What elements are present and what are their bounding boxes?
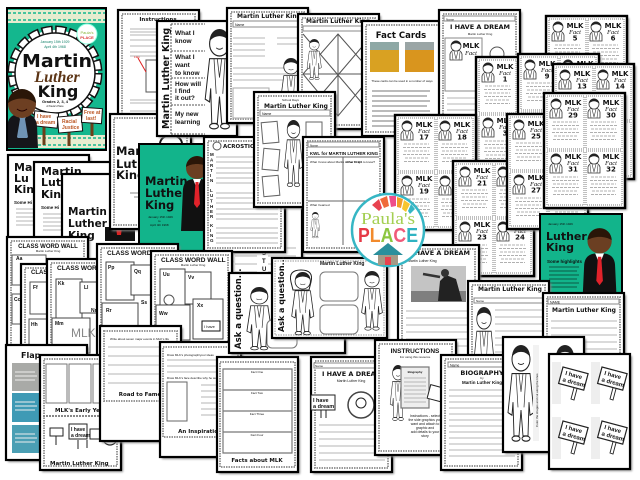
panel: cootie catcher sheet (298, 14, 381, 131)
panel: early years flap sheet (40, 355, 123, 472)
panel: acrostic sheet: L (210, 188, 213, 193)
panel: fact cards 21 to 24: Fact (475, 228, 488, 235)
panel: teal Martin Luther King sheet: Luther (145, 186, 188, 200)
panel: KWL sheet: How will (175, 81, 201, 88)
panel: fact cards 29 to 32: Fact (566, 160, 579, 167)
panel: Ask a question girl sheet: Ask a question... (277, 256, 286, 332)
panel: class word wall 4 (97, 244, 180, 361)
panel: acrostic sheet: R (210, 214, 214, 219)
panel: white sheet Martin Luther King highlights 1: Lu (14, 172, 29, 185)
panel: class word wall 3: Kk (58, 281, 65, 287)
panel: class word wall 5: Xx (197, 303, 203, 309)
scalloped circle (12, 30, 98, 116)
panel: sheet with figure and frames (254, 92, 337, 209)
panel: fact cards 17 to 20 (395, 115, 478, 232)
signs: Justice (62, 125, 79, 131)
panel: teal Martin Luther King sheet: King (145, 198, 174, 212)
panel: I have a dream with sign sheet: Name (315, 364, 323, 368)
panel: fact cards 25 to 28: 27 (531, 186, 541, 194)
panel: Facts about MLK sheet: Facts about MLK (231, 458, 283, 464)
panel: alphabet sheet (221, 196, 304, 313)
panel: fact cards 17 to 20: Fact (417, 128, 430, 135)
panel: K-W-L for Martin Luther King sheet: What I'd like to know? (346, 160, 375, 164)
panel: fact cards 29 to 32: 30 (606, 112, 616, 120)
panel: fact cards 29 to 32: 29 (568, 112, 578, 120)
panel: cover: Martin (22, 51, 92, 72)
panel: fact cards 9 to 12: Fact (540, 67, 553, 74)
panel: instructions sheet: Flap (134, 55, 140, 59)
panel: fact cards 21 to 24: MLK (474, 167, 491, 175)
panel: Instructions biography sheet: the side graphics you (408, 418, 442, 422)
panel: cover: Luther (33, 69, 80, 86)
panel: KWL sheet: What I (175, 54, 195, 61)
panel: fact cards 5 to 8: 5 (573, 34, 578, 42)
panel: fact cards 17 to 20: MLK (416, 121, 433, 129)
panel: fact cards 25 to 28: Fact (529, 127, 542, 134)
panel: acrostic sheet: T (210, 198, 213, 204)
panel: class word wall 1 (7, 237, 90, 354)
panel: fact cards 1 to 4: 3 (503, 130, 508, 138)
boy in suit (8, 89, 38, 148)
panel: acrostic sheet: E (210, 209, 213, 214)
panel: alphabet sheet: U (262, 267, 266, 273)
signs: Racial (62, 119, 77, 125)
panel: fact cards 21 to 24: Fact (475, 174, 488, 181)
panel: fact cards 5 to 8: Fact (568, 29, 581, 36)
panel: fact cards 13 to 16: 13 (577, 82, 587, 90)
panel: K-W-L for Martin Luther King sheet: What I know about Martin Luther King? (310, 160, 362, 164)
mini logo: Paula's (80, 30, 94, 35)
panel: class word wall 3: Mm (55, 321, 64, 327)
panel: An Inspiration sheet (160, 342, 243, 459)
bunting (372, 196, 415, 214)
panel: An Inspiration sheet: An Inspiration (178, 429, 222, 435)
panel: Facts about MLK sheet: Fact One (251, 370, 263, 374)
panel: acrostic sheet: M (210, 152, 214, 157)
signs: last! (86, 116, 97, 122)
panel: class word wall 4: Rr (106, 308, 112, 314)
icon: head peeking (160, 135, 182, 144)
panel: Ask a question girl sheet (272, 256, 389, 340)
panel: NAME biography lined sheet: Martin Luther King (552, 307, 616, 314)
panel: cootie catcher sheet: Martin Luther King (306, 18, 370, 25)
panel: Instructions biography sheet: story (421, 434, 429, 438)
panel: class word wall 3: MLK (71, 326, 96, 340)
panel: Biography lined sheet: Name (450, 364, 459, 368)
panel: white sheet Martin Luther King highlights 1 (8, 155, 91, 272)
panel: Ask a question boy sheet (229, 269, 347, 355)
panel: class word wall 5: Vv (188, 275, 194, 281)
panel: Road to Fame sheet: Write about seven major events in MLK's life (110, 337, 169, 341)
panel: Facts about MLK sheet: Fact Two (251, 391, 263, 395)
panel: fact cards 5 to 8: Fact (606, 29, 619, 36)
panel: teal Martin Luther King sheet: to (158, 219, 161, 223)
panel: Ask a question boy sheet: Ask a question... (234, 269, 244, 349)
panel: Biography lined sheet: BIOGRAPHY (460, 369, 504, 377)
panel: sheet with Martin Luther King title: King (116, 168, 145, 182)
panel: alphabet sheet: R (262, 243, 267, 249)
panel: KWL sheet: know (175, 38, 193, 45)
panel: fact cards 1 to 4: Fact (498, 70, 511, 77)
panel: instructions sheet: Instructions (139, 17, 177, 23)
panel: KWL sheet (157, 21, 239, 138)
panel: white sheet Martin Luther King highlights 3 (62, 174, 145, 291)
panel: flap book photos sheet (6, 345, 89, 462)
image: MLK photo at podium (411, 266, 466, 302)
panel: teal Martin Luther King sheet: January 15th 1929 (148, 215, 173, 219)
panel: Martin Luther King biography lined sheet (468, 281, 551, 398)
panel: class word wall 3: Nn (91, 308, 98, 314)
panel: white sheet Martin Luther King highlights 1: Kin (14, 183, 34, 196)
panel: fact cards 29 to 32 (544, 93, 627, 210)
panel: class word wall 5 (151, 251, 234, 368)
panel: Biography lined sheet: Martin Luther King (462, 380, 502, 385)
panel: teal Luther King highlights sheet: January 15th 1929 (548, 222, 573, 226)
panel: acrostic sheet: G (210, 238, 214, 243)
panel: An Inspiration sheet: Draw MLK's photograph/your ideas (167, 353, 214, 357)
panel: class word wall 2: Hh (31, 322, 38, 328)
panel: white sheet Martin Luther King highlights 2 (34, 162, 117, 279)
panel: fact cards 25 to 28: 25 (531, 132, 541, 140)
panel: alphabet sheet: E (229, 243, 233, 249)
panel: white sheet Martin Luther King highlights 3: Martin (68, 206, 107, 218)
panel: Instructions biography sheet: want and attach to (411, 422, 439, 426)
panel: K-W-L for Martin Luther King sheet: What I learned (310, 203, 330, 207)
mini logo: PLACE (80, 35, 94, 40)
panel: I have a dream sheet: Fact (464, 50, 477, 57)
panel: sheet with Martin Luther King title (110, 114, 193, 231)
mini logo (77, 24, 97, 44)
panel: KWL sheet: My new (175, 111, 199, 118)
panel: figure strips: Color the images and cut along the lines (535, 373, 539, 427)
panel: class word wall 5: Martin Luther King (181, 263, 206, 267)
panel: fact cards 25 to 28: Fact (529, 181, 542, 188)
panel: Biography lined sheet: by (480, 376, 484, 380)
panel: white sheet Martin Luther King highlights 1: Some Hi (14, 200, 32, 205)
signs (33, 107, 102, 146)
panel: fact cards 25 to 28: MLK (528, 120, 545, 128)
panel: An Inspiration sheet: Draw MLK's face describe why he was (167, 376, 219, 380)
panel: class word wall 1: Aa (16, 256, 23, 262)
panel: NAME biography lined sheet: NAME (550, 300, 561, 304)
panel: white sheet Martin Luther King highlights 3: King (68, 230, 95, 242)
panel: sheet with figure and frames: School Days (282, 98, 299, 102)
panel: alphabet sheet: G (229, 259, 234, 265)
panel: sheet with Martin Luther King title: Luther (116, 157, 159, 171)
panel: cover: King (38, 82, 78, 101)
panel: KWL sheet: want (174, 62, 191, 69)
panel: instructions sheet (118, 10, 201, 127)
panel: fact cards 21 to 24: 21 (477, 180, 487, 188)
panel: I have a dream with sign sheet: Martin Luther King (337, 379, 365, 383)
panel: fact cards 9 to 12: 9 (545, 72, 550, 80)
panel: KWL sheet: to know (175, 70, 200, 77)
panel: fact cards 17 to 20: MLK (454, 121, 471, 129)
panel: fact cards 1 to 4: MLK (497, 117, 514, 125)
panel: fact cards 29 to 32: 31 (568, 166, 578, 174)
panel: Martin Luther King biography lined sheet: Martin Luther King (478, 286, 542, 293)
panel: KWL sheet: I find (175, 88, 191, 95)
panel: white sheet Martin Luther King highlights 3: Luther (68, 218, 108, 230)
panel: acrostic sheet: U (210, 193, 213, 198)
panel: sheet with Martin Luther King title: Martin (116, 144, 159, 158)
panel: I have a dream photo sheet: I HAVE A DREAM (410, 249, 470, 257)
panel: fact cards 9 to 12: MLK (577, 60, 594, 68)
panel: I have a dream signs (549, 354, 632, 471)
panel: fact cards 9 to 12: MLK (539, 60, 556, 68)
panel: cover: Grades 2, 3, 4 (42, 99, 69, 104)
panel: class word wall 1: Cc (14, 297, 21, 303)
panel: fact cards 21 to 24: Fact (513, 228, 526, 235)
panel: fact cards 13 to 16: 14 (615, 82, 625, 90)
icon: suited figure shoulders (105, 227, 135, 241)
panel: fact cards 13 to 16: Fact (613, 77, 626, 84)
panel: fact cards 25 to 28: MLK (528, 174, 545, 182)
panel: acrostic sheet: N (210, 233, 213, 238)
panel: teal Luther King highlights sheet (540, 214, 622, 314)
panel: fact cards 13 to 16 (553, 64, 636, 181)
panel: class word wall 2: CLASS (31, 270, 51, 276)
panel: I have a dream photo sheet (398, 245, 481, 362)
panel: class word wall 4: CLASS WORD WALL (107, 250, 172, 257)
panel: fact cards 1 to 4: MLK (497, 63, 514, 71)
panel: class word wall 3: Ll (84, 285, 89, 291)
panel: fact cards 13 to 16: MLK (574, 70, 591, 78)
panel: Martin Luther King what I know sheet: Martin Luther King (237, 13, 301, 20)
panel: fact cards 29 to 32: Fact (604, 160, 617, 167)
panel: sheet with figure and frames: Name (262, 112, 271, 116)
panel: fact cards 1 to 4: 1 (503, 76, 508, 84)
panel: white sheet Martin Luther King highlights 2: King (41, 188, 69, 201)
panel: Instructions biography sheet: Biography (408, 370, 423, 374)
panel: fact cards sheet: Fact Cards (376, 31, 426, 41)
panel: fact cards 5 to 8 (546, 16, 629, 133)
panel: teal Luther King highlights sheet: Some highlights (547, 259, 582, 264)
panel: fact cards 5 to 8: MLK (567, 22, 584, 30)
panel: early years flap sheet: MLK's Early Years (55, 408, 110, 414)
panel: KWL sheet: Martin Luther King (161, 28, 172, 129)
panel: Instructions biography sheet: add details to your (411, 430, 440, 434)
panel: fact cards 1 to 4 (476, 57, 559, 174)
panel: fact cards 21 to 24: MLK (474, 221, 491, 229)
panel: fact cards 17 to 20: 17 (419, 134, 429, 142)
panel: alphabet sheet: S (262, 251, 266, 257)
panel: acrostic sheet: I (210, 228, 211, 233)
panel: acrostic sheet: ACROSTIC (223, 144, 254, 150)
panel: class word wall 5: Uu (163, 272, 170, 278)
panel: white sheet Martin Luther King highlights 2: Lut (41, 176, 61, 189)
panel: fact cards 29 to 32: MLK (565, 99, 582, 107)
panel: alphabet sheet: F (229, 251, 233, 257)
panel: Biography lined sheet (441, 355, 524, 472)
panel: cover (7, 8, 106, 150)
panel: fact cards 17 to 20: MLK (416, 175, 433, 183)
panel: fact cards 9 to 12 (518, 54, 601, 171)
panel: K-W-L for Martin Luther King sheet (303, 137, 386, 254)
panel: acrostic sheet: K (210, 223, 214, 228)
panel: K-W-L for Martin Luther King sheet: Name (310, 144, 318, 148)
panel: I have a dream sheet: MLK (463, 42, 480, 50)
panel: early years flap sheet: a dream (71, 433, 91, 439)
decorative band top (8, 10, 105, 23)
panel: fact cards 29 to 32: MLK (565, 153, 582, 161)
panel: fact cards 1 to 4: Fact (498, 124, 511, 131)
panel: fact cards sheet (362, 21, 445, 138)
panel: Instructions biography sheet: graphic and (416, 426, 434, 430)
panel: cover: January 15th 1929 (40, 40, 70, 44)
panel: K-W-L for Martin Luther King sheet: KWL for MARTIN LUTHER KING (310, 151, 379, 156)
panel: fact cards 29 to 32: MLK (603, 99, 620, 107)
panel: Road to Fame sheet (100, 326, 183, 443)
panel: cover: April 4th 1968 (44, 45, 66, 49)
panel: class word wall 3: CLASS WORD (57, 265, 102, 272)
logo: Paula's Place (352, 194, 424, 266)
panel: alphabet sheet: T (262, 259, 266, 265)
panel: Ask a question girl sheet: Martin Luther King (320, 261, 364, 267)
panel: I have a dream with sign sheet: I HAVE A DREAM (322, 370, 382, 378)
panel: class word wall 5: Ww (159, 311, 168, 317)
signs: Free at (84, 110, 101, 116)
panel: Instructions biography sheet: For using this resource (400, 355, 431, 359)
panel: teal Martin Luther King sheet (139, 144, 221, 260)
panel: class word wall 4: Ss (141, 300, 147, 306)
panel: teal Luther King highlights sheet: King (546, 241, 574, 254)
panel: class word wall 5: I have (204, 324, 216, 329)
panel: fact cards sheet: These cards can be used in a number of ways (371, 79, 433, 83)
panel: acrostic sheet: R (210, 163, 214, 168)
panel: fact cards 17 to 20: Fact (455, 128, 468, 135)
panel: acrostic sheet: A (210, 158, 214, 162)
panel: fact cards 29 to 32: Fact (566, 106, 579, 113)
panel: acrostic sheet: N (210, 178, 213, 183)
panel: fact cards 17 to 20: Fact (417, 182, 430, 189)
panel: class word wall 2: Ff (33, 285, 38, 291)
panel: early years flap sheet: Martin Luther King (50, 461, 109, 467)
panel: early years flap sheet: I have (71, 427, 85, 433)
panel: KWL sheet: it out? (175, 95, 195, 102)
panel: I have a dream with sign sheet: a dream (313, 404, 334, 410)
panel: NAME biography lined sheet (543, 293, 626, 410)
panel: class word wall 1: CLASS WORD WALL (18, 244, 78, 250)
panel: fact cards 5 to 8: MLK (605, 22, 622, 30)
panel: Facts about MLK sheet: Fact Three (250, 412, 265, 416)
panel: teal Luther King highlights sheet: Luther (546, 230, 587, 243)
panel: cover: A Paula's Place (46, 105, 64, 108)
panel: acrostic sheet: H (210, 204, 213, 209)
panel: class word wall 4: Pp (108, 265, 114, 271)
panel: Instructions biography sheet (375, 340, 458, 457)
panel: I have a dream with sign sheet (311, 357, 394, 474)
panel: fact cards 29 to 32: Fact (604, 106, 617, 113)
logo: Paula's Place: Paula's (361, 209, 415, 228)
panel: Facts about MLK sheet: Fact Four (251, 433, 263, 437)
panel: fact cards 25 to 28 (507, 114, 590, 231)
panel: acrostic sheet: I (210, 173, 211, 178)
panel: fact cards 17 to 20: 19 (419, 188, 429, 196)
panel: I have a dream with sign sheet: I have (313, 398, 329, 404)
panel: class word wall 2 (21, 264, 104, 381)
panel: class word wall 4: Qq (134, 269, 141, 275)
panel: KWL sheet: What I (175, 30, 195, 37)
panel: teal Martin Luther King sheet: Martin (145, 174, 188, 188)
panel: fact cards 13 to 16: MLK (612, 70, 629, 78)
panel: class word wall 5: CLASS WORD WALL (161, 257, 226, 264)
panel: Instructions biography sheet: INSTRUCTIONS (391, 348, 440, 355)
panel: flap book photos sheet: Flap (21, 351, 41, 360)
panel: class word wall 1: Martin Luther King (36, 249, 61, 253)
panel: I have a dream sheet: Martin Luther King (468, 32, 493, 36)
panel: white sheet Martin Luther King highlights 2: Some Hi (41, 205, 59, 210)
logo: Paula's Place: PLACE (358, 225, 418, 247)
panel: I have a dream sheet: I HAVE A DREAM (450, 23, 510, 31)
panel: fact cards 29 to 32: 32 (606, 166, 616, 174)
signs: I have (37, 114, 51, 120)
panel: KWL sheet: learning (175, 119, 200, 126)
panel: Road to Fame sheet: Road to Fame (119, 392, 162, 398)
panel: white sheet Martin Luther King highlights 1: Ma (14, 161, 32, 174)
panel: acrostic sheet (204, 137, 287, 254)
panel: Facts about MLK sheet (217, 357, 300, 474)
panel: I have a dream sheet (439, 10, 522, 127)
panel: Instructions biography sheet: Instructions - select (410, 414, 440, 418)
panel: teal Martin Luther King sheet: April 4th 1968 (150, 223, 169, 227)
signs: a dream (36, 120, 56, 126)
panel: fact cards 29 to 32: MLK (603, 153, 620, 161)
panel: fact cards 21 to 24: 23 (477, 234, 487, 242)
panel: alphabet sheet: H (229, 267, 233, 273)
panel: white sheet Martin Luther King highlights 2: Martin (41, 165, 82, 178)
panel: sheet with figure and frames: Martin Luther King (264, 103, 328, 110)
panel: fact cards 21 to 24: 24 (515, 234, 525, 242)
panel: acrostic sheet: T (210, 168, 213, 173)
panel: I have a dream photo sheet: Martin Luther King (408, 259, 437, 263)
panel: fact cards 17 to 20: MLK (454, 175, 471, 183)
panel: Martin Luther King what I know sheet (227, 8, 310, 125)
house (373, 243, 403, 265)
panel: I have a dream sheet: Name (446, 18, 454, 22)
panel: fact cards 5 to 8: 6 (611, 34, 616, 42)
panel: Martin Luther King what I know sheet: Name (235, 23, 244, 27)
panel: class word wall 3 (47, 259, 130, 376)
panel: Martin Luther King biography lined sheet: Name (476, 299, 484, 303)
panel: fact cards 17 to 20: 18 (457, 134, 467, 142)
panel: fact cards 13 to 16: Fact (575, 77, 588, 84)
panel: fact cards 21 to 24 (453, 161, 536, 278)
panel: figure strips (503, 337, 586, 454)
